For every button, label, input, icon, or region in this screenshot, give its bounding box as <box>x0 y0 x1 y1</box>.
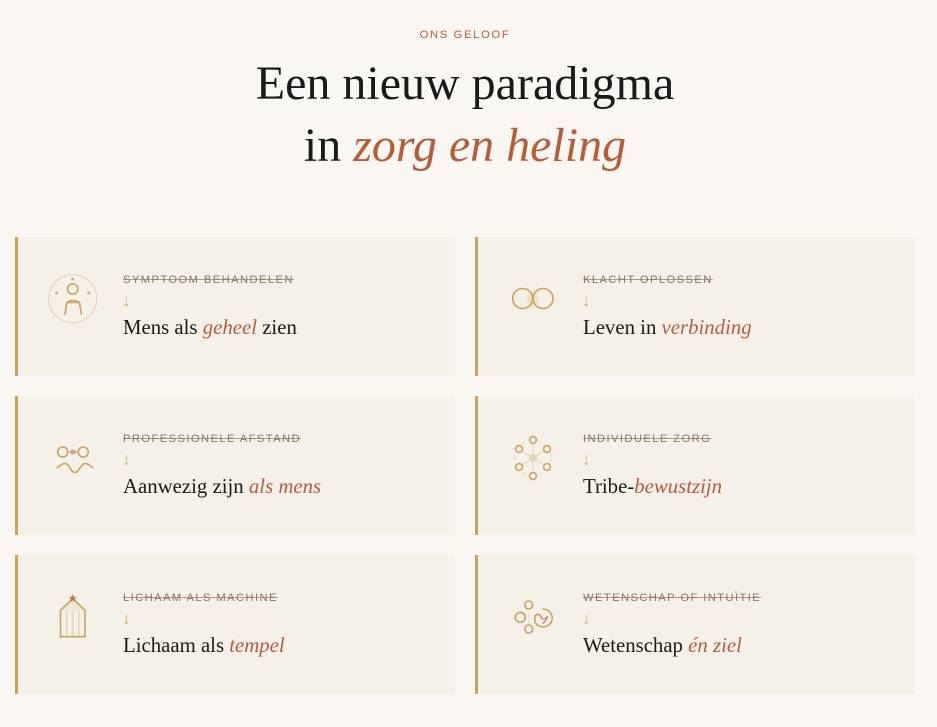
title: in zorg en heling <box>304 119 626 172</box>
title <box>256 57 674 172</box>
title: Een nieuw paradigma <box>256 57 674 110</box>
panel: leven in verbinding <box>475 237 915 376</box>
text: symptoom behandelen <box>122 274 297 339</box>
panel: wetenschap en ziel <box>475 555 915 694</box>
panel: tribe-bewustzijn <box>475 396 915 535</box>
text: individuele zorg: ↓ <box>582 450 590 469</box>
text: individuele zorg: INDIVIDUELE ZORG <box>583 433 711 445</box>
eyebrow: ONS GELOOF <box>420 29 510 41</box>
text: klacht oplossen: ↓ <box>582 291 590 310</box>
text: klacht oplossen: KLACHT OPLOSSEN <box>583 274 713 286</box>
text: lichaam als machine <box>122 592 285 657</box>
text: wetenschap of intuitie: ↓ <box>582 609 590 628</box>
text: symptoom behandelen: SYMPTOOM BEHANDELEN <box>123 274 294 286</box>
text: klacht oplossen: Leven in verbinding <box>583 316 752 339</box>
panel: aanwezig zijn <box>15 396 455 535</box>
text: wetenschap of intuitie: Wetenschap én ziel <box>583 634 742 657</box>
text: professionele afstand: PROFESSIONELE AFSTAND <box>123 433 301 445</box>
text: klacht oplossen <box>582 274 752 339</box>
text: symptoom behandelen: Mens als geheel zien <box>123 316 297 339</box>
panel: mens als geheel <box>15 237 455 376</box>
text: individuele zorg <box>582 433 722 498</box>
text: professionele afstand: Aanwezig zijn als mens <box>123 475 321 498</box>
text: wetenschap of intuitie: WETENSCHAP OF INTUÏTIE <box>583 592 761 604</box>
text: lichaam als machine: Lichaam als tempel <box>123 634 285 657</box>
panel: lichaam als tempel <box>15 555 455 694</box>
text: lichaam als machine: LICHAAM ALS MACHINE <box>123 592 278 604</box>
text: professionele afstand <box>122 433 321 498</box>
text: lichaam als machine: ↓ <box>122 609 130 628</box>
text: symptoom behandelen: ↓ <box>122 291 130 310</box>
text: individuele zorg: Tribe-bewustzijn <box>583 475 722 498</box>
text: wetenschap of intuitie <box>582 592 762 657</box>
text: professionele afstand: ↓ <box>122 450 130 469</box>
